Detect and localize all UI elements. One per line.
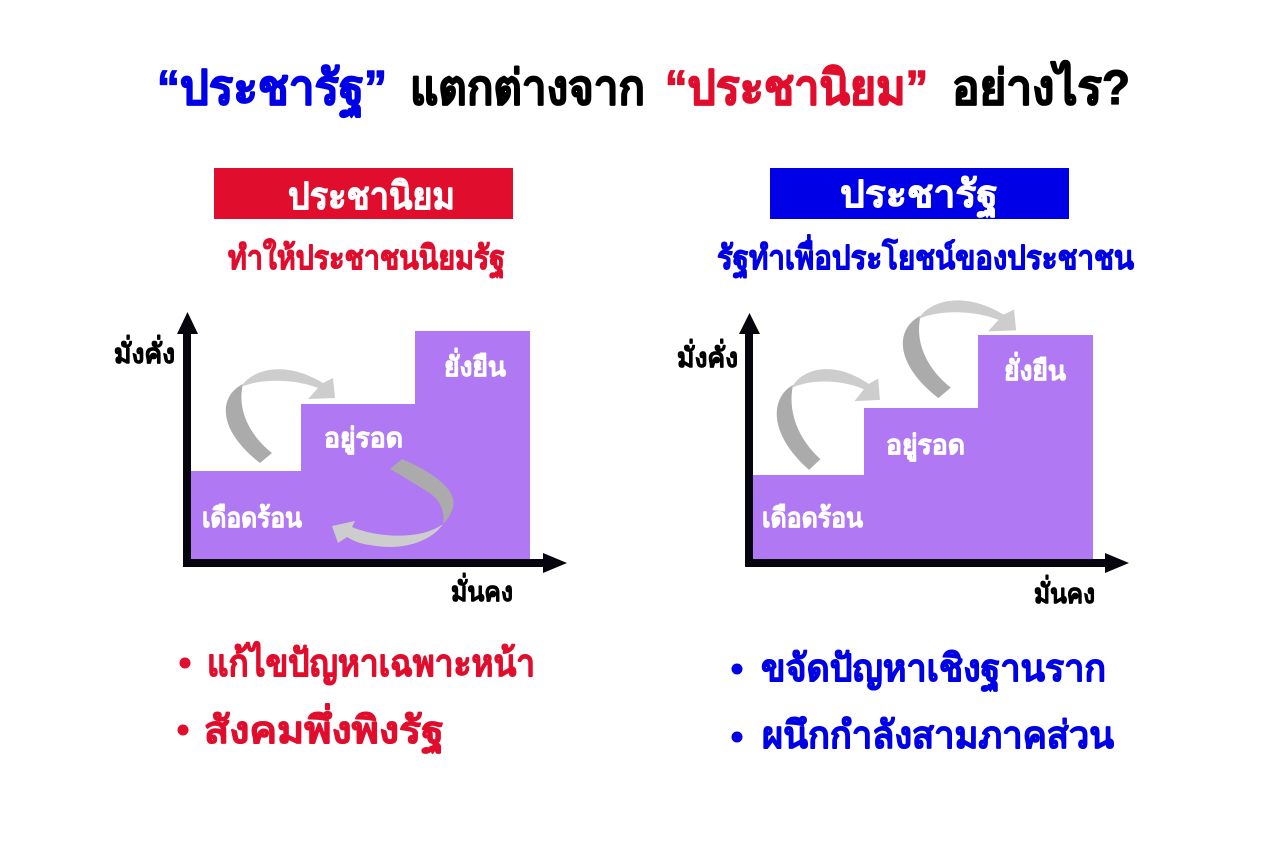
label: step 1: เดือดร้อน: [762, 503, 863, 533]
label: step 3: ยั่งยืน: [444, 347, 507, 382]
bullet list: populism: แก้ไขปัญหาเฉพาะหน้า: [207, 641, 535, 685]
arrow: back down from อยู่รอด to เดือดร้อน: [332, 459, 454, 547]
bullet list: populism: [178, 641, 535, 755]
bullet list: pracharat: ขจัดปัญหาเชิงฐานราก: [761, 648, 1106, 693]
chart: pracharat staircase: [677, 300, 1129, 609]
subtitle: pracharat: รัฐทำเพื่อประโยชน์ของประชาชน: [717, 234, 1134, 279]
title: อย่างไร?: [952, 59, 1130, 115]
label: y axis: มั่งคั่ง: [677, 338, 738, 373]
label: step 1: เดือดร้อน: [202, 503, 302, 533]
banner: ประชานิยม: ประชานิยม: [288, 176, 455, 218]
label: step 2: อยู่รอด: [886, 430, 965, 462]
staircase area: [191, 331, 530, 559]
bullet list: pracharat: [732, 648, 1114, 757]
panel: ประชานิยม: [114, 168, 567, 755]
title: แตกต่างจาก: [410, 62, 645, 115]
panel: ประชารัฐ: [677, 168, 1134, 757]
title: “ประชารัฐ”: [157, 62, 387, 119]
label: y axis: มั่งคั่ง: [114, 334, 175, 369]
label: step 3: ยั่งยืน: [1004, 351, 1067, 386]
label: x axis: มั่นคง: [451, 572, 513, 607]
staircase area: [753, 335, 1093, 559]
axes arrows: [177, 312, 567, 573]
banner: ประชารัฐ: ประชารัฐ: [840, 174, 998, 219]
arrow: up from เดือดร้อน to อยู่รอด: [777, 369, 880, 470]
banner: ประชารัฐ: [770, 168, 1069, 219]
banner: ประชานิยม: [214, 168, 513, 219]
title: [157, 59, 1130, 119]
chart: populism staircase: [114, 312, 567, 607]
bullet list: populism: สังคมพึ่งพิงรัฐ: [204, 703, 444, 755]
subtitle: populism: ทำให้ประชาชนนิยมรัฐ: [228, 238, 505, 279]
label: x axis: มั่นคง: [1034, 574, 1095, 609]
title: “ประชานิยม”: [665, 62, 928, 115]
bullet list: pracharat: ผนึกกำลังสามภาคส่วน: [762, 715, 1114, 757]
axes arrows: [739, 313, 1129, 573]
label: step 2: อยู่รอด: [324, 423, 403, 455]
arrow: up from อยู่รอด to ยั่งยืน: [903, 300, 1016, 398]
arrow: up from เดือดร้อน to อยู่รอด: [226, 369, 335, 463]
